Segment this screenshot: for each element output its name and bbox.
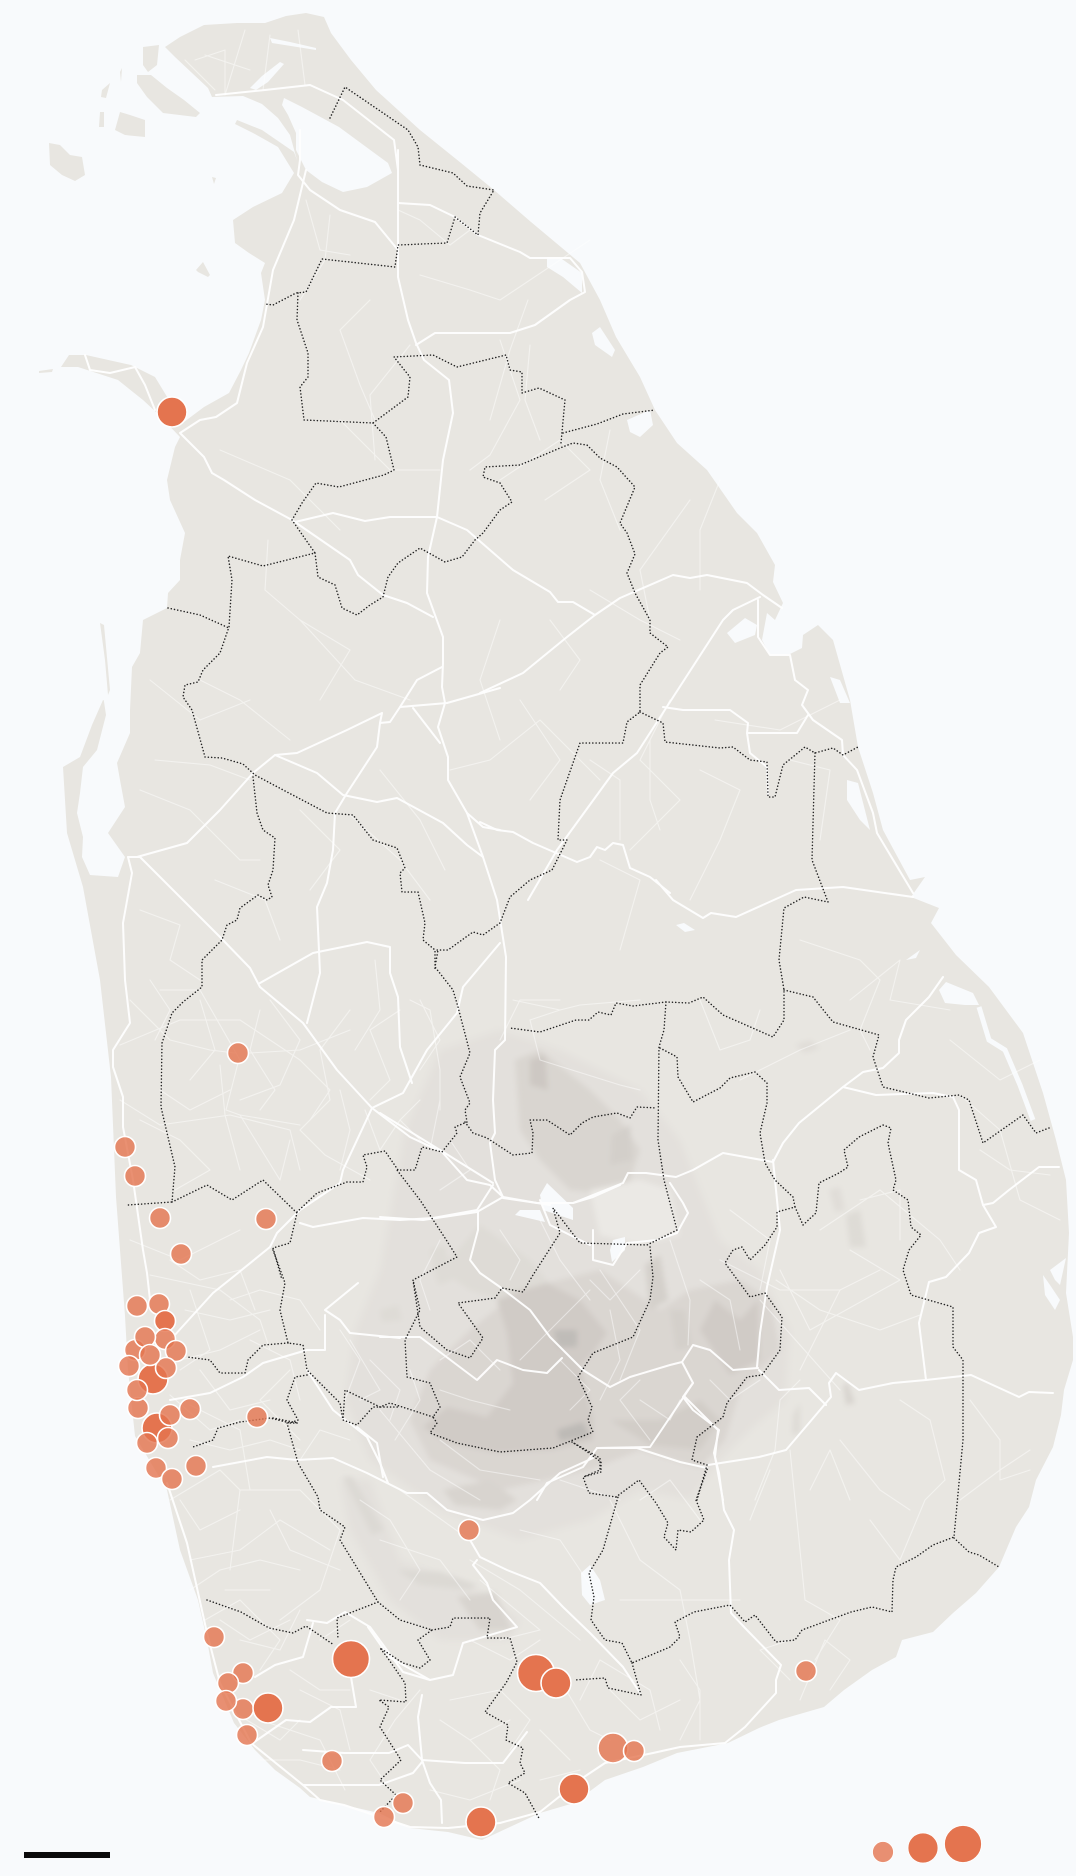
hill shading: central highlands (340, 1030, 866, 1640)
bubble: north-west (Mannar) (157, 397, 187, 427)
water: lagoons and reservoirs (77, 38, 1066, 1605)
data points: incident bubbles (114, 397, 816, 1837)
size legend bubbles (872, 1826, 982, 1863)
scale bar (24, 1852, 110, 1858)
bubbles: Colombo cluster (118, 1294, 268, 1490)
bubbles: north-western cluster (114, 1042, 276, 1264)
bubbles: south and south-west (204, 1520, 816, 1837)
administrative boundaries (dotted) (128, 87, 1049, 1820)
